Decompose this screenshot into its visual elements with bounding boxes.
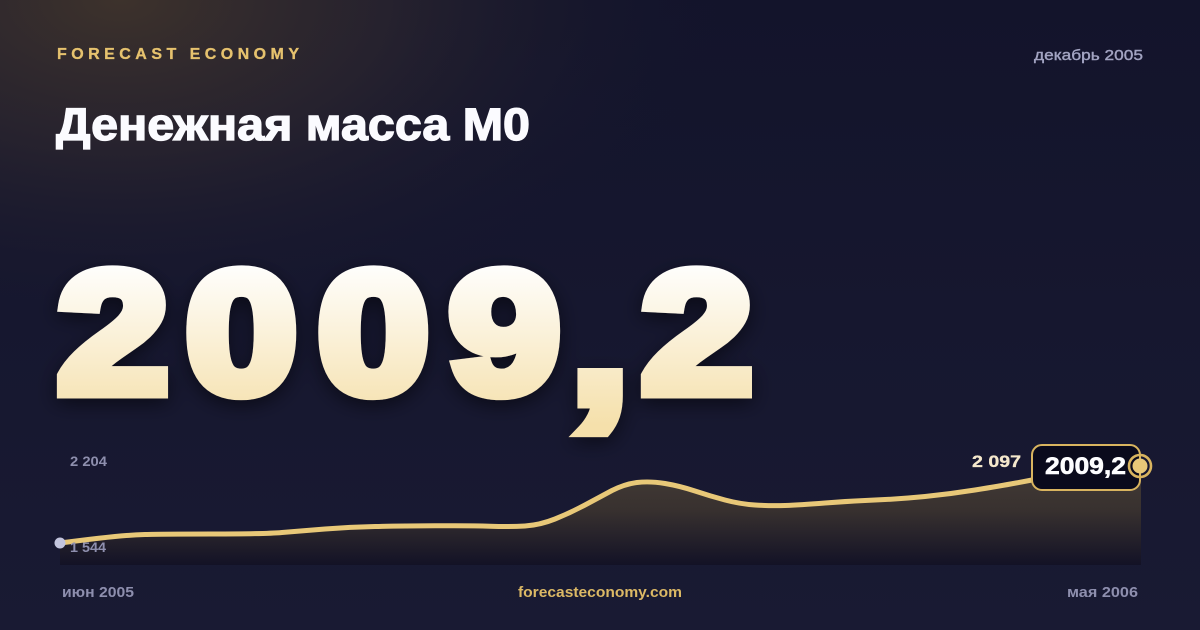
big value: , <box>570 236 630 442</box>
area chart <box>54 462 1141 565</box>
end point marker <box>1129 455 1151 477</box>
end date: мая 2006 <box>1067 584 1138 601</box>
chart area <box>60 462 1141 565</box>
value badge <box>1032 445 1140 490</box>
date label: декабрь 2005 <box>1034 47 1143 64</box>
start date: июн 2005 <box>62 584 134 601</box>
start point marker <box>54 538 66 548</box>
axis label: min: 1 544 <box>70 539 106 555</box>
chart line <box>60 480 1032 543</box>
axis label: max: 2 204 <box>70 453 107 469</box>
website: forecasteconomy.com <box>518 584 682 601</box>
previous value label: 2 097 <box>972 452 1021 471</box>
big value: 2009 <box>58 237 560 429</box>
big value: 2 <box>641 237 752 429</box>
value badge: 2009,2 <box>1045 453 1126 480</box>
brand label: FORECAST ECONOMY <box>57 46 299 63</box>
title: Денежная масса М0 <box>56 99 530 150</box>
